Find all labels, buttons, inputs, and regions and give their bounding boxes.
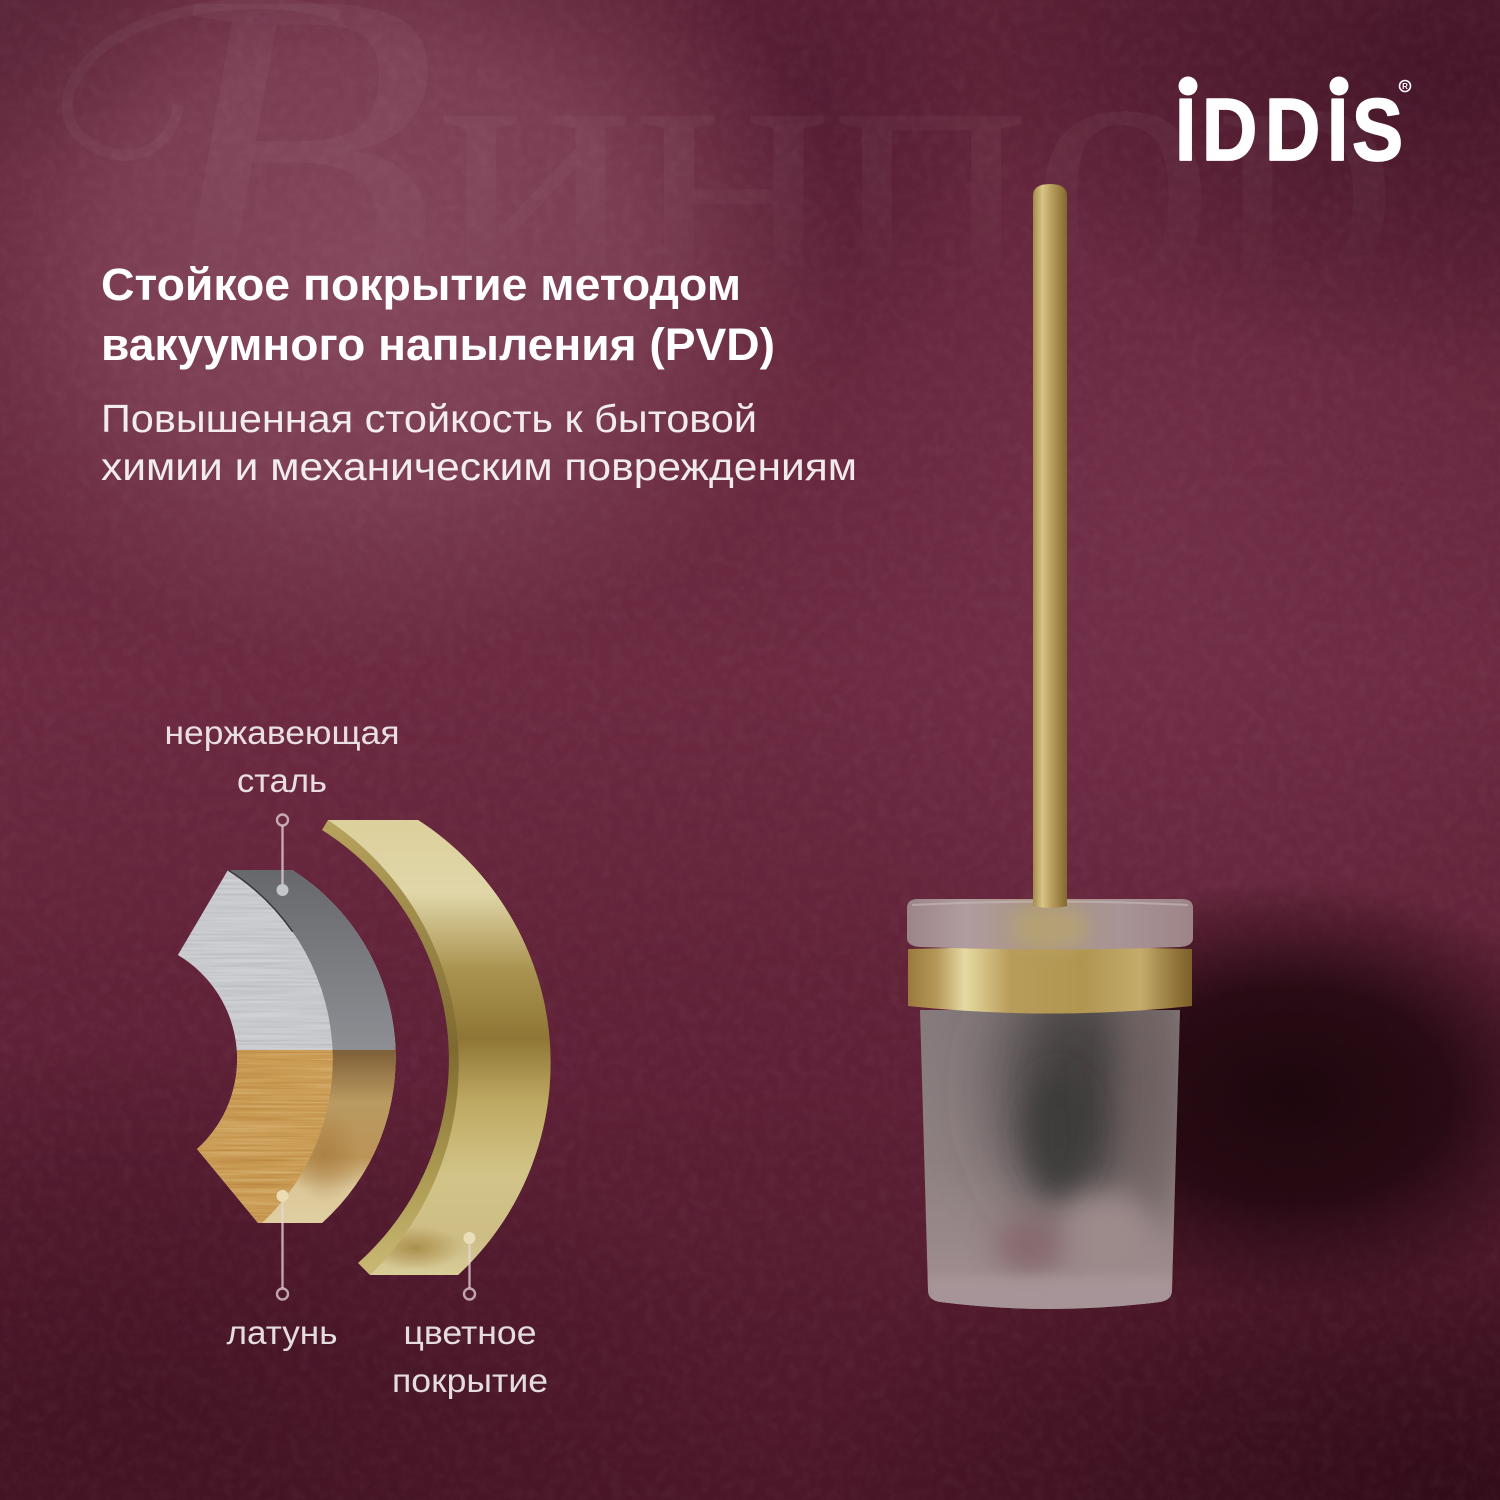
- subheading text: [101, 398, 857, 489]
- watermark word: [192, 4, 1366, 146]
- heading: вакуумного напыления (PVD): [101, 319, 775, 370]
- frosted glass cup: [920, 1010, 1180, 1309]
- callout: brass: латунь: [226, 1314, 338, 1351]
- product: toilet brush holder: [907, 184, 1193, 1315]
- callout: coloured coating: покрытие: [392, 1362, 548, 1399]
- logo: iddis: IDDIS: [1175, 81, 1403, 179]
- callout: coloured coating: цветное: [404, 1314, 536, 1351]
- subheading text: Повышенная стойкость к бытовой: [101, 398, 757, 441]
- callout: stainless steel: [164, 714, 400, 896]
- callout: brass: [226, 1190, 338, 1351]
- subheading text: химии и механическим повреждениям: [101, 446, 857, 489]
- callout: coloured coating: [392, 1232, 548, 1399]
- callout: stainless steel: сталь: [237, 762, 327, 799]
- brush rod: [1033, 184, 1067, 906]
- callout: stainless steel: нержавеющая: [164, 714, 400, 751]
- frosted glass lid: [907, 899, 1193, 950]
- steel half: [178, 870, 396, 1050]
- layer diagram: coloured coating arc: [322, 820, 551, 1275]
- logo: iddis: R: [1402, 82, 1408, 91]
- metal ring: [908, 947, 1192, 1014]
- brass half: [197, 1050, 396, 1223]
- layer diagram: steel and brass section: [178, 870, 400, 1230]
- heading: [101, 259, 775, 370]
- heading: Стойкое покрытие методом: [101, 259, 741, 310]
